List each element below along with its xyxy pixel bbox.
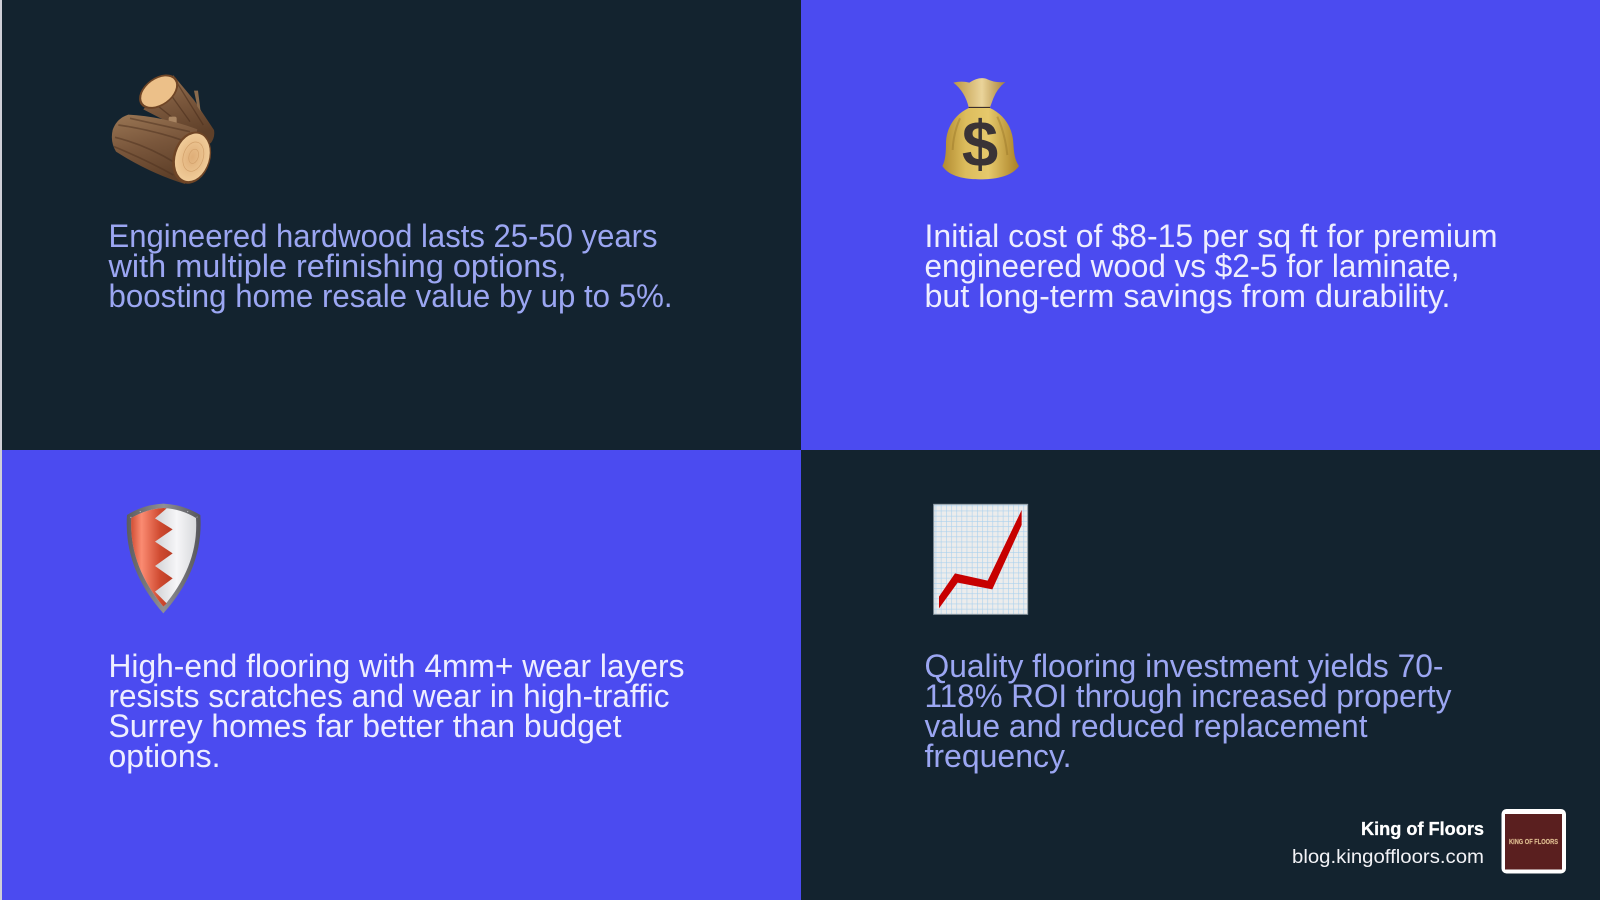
text: cost: Initial cost of $8-15 per sq ft for premium xyxy=(924,218,1498,254)
text: cost: but long-term savings from durability. xyxy=(924,278,1450,314)
text: wear resistance: High-end flooring with 4mm+ wear layers xyxy=(108,648,684,684)
icon: rising chart xyxy=(934,504,1028,614)
panel: durability xyxy=(2,0,801,450)
text: durability: Engineered hardwood lasts 25-50 years xyxy=(108,218,658,254)
text: wear resistance: resists scratches and wear in high-traffic xyxy=(108,678,670,714)
text: return on investment: frequency. xyxy=(924,738,1072,774)
icon: money bag: $ xyxy=(962,107,998,180)
left edge strip xyxy=(0,0,2,900)
text: wear resistance: options. xyxy=(108,738,220,774)
text: cost xyxy=(924,218,1498,314)
text: return on investment xyxy=(924,648,1452,774)
logo xyxy=(1502,809,1566,874)
panel: wear resistance xyxy=(2,450,801,900)
text: wear resistance xyxy=(108,648,684,774)
text: wear resistance: Surrey homes far better than budget xyxy=(108,708,622,744)
icon: money bag xyxy=(942,78,1019,180)
panel: return on investment xyxy=(801,450,1600,900)
panel: cost xyxy=(801,0,1600,450)
text: durability: with multiple refinishing options, xyxy=(107,248,566,284)
text: return on investment: value and reduced replacement xyxy=(924,708,1368,744)
brand footer xyxy=(1292,809,1566,874)
text: durability xyxy=(107,218,673,314)
text: durability: boosting home resale value by up to 5%. xyxy=(108,278,672,314)
icon: wooden logs xyxy=(112,67,217,189)
text: return on investment: Quality flooring investment yields 70- xyxy=(924,648,1444,684)
logo: KING OF FLOORS xyxy=(1509,839,1558,846)
text: cost: engineered wood vs $2-5 for laminate, xyxy=(924,248,1460,284)
icon: shield xyxy=(127,504,201,613)
brand name: King of Floors xyxy=(1361,819,1484,839)
brand url: blog.kingoffloors.com xyxy=(1292,847,1484,868)
text: return on investment: 118% ROI through increased property xyxy=(924,678,1452,714)
